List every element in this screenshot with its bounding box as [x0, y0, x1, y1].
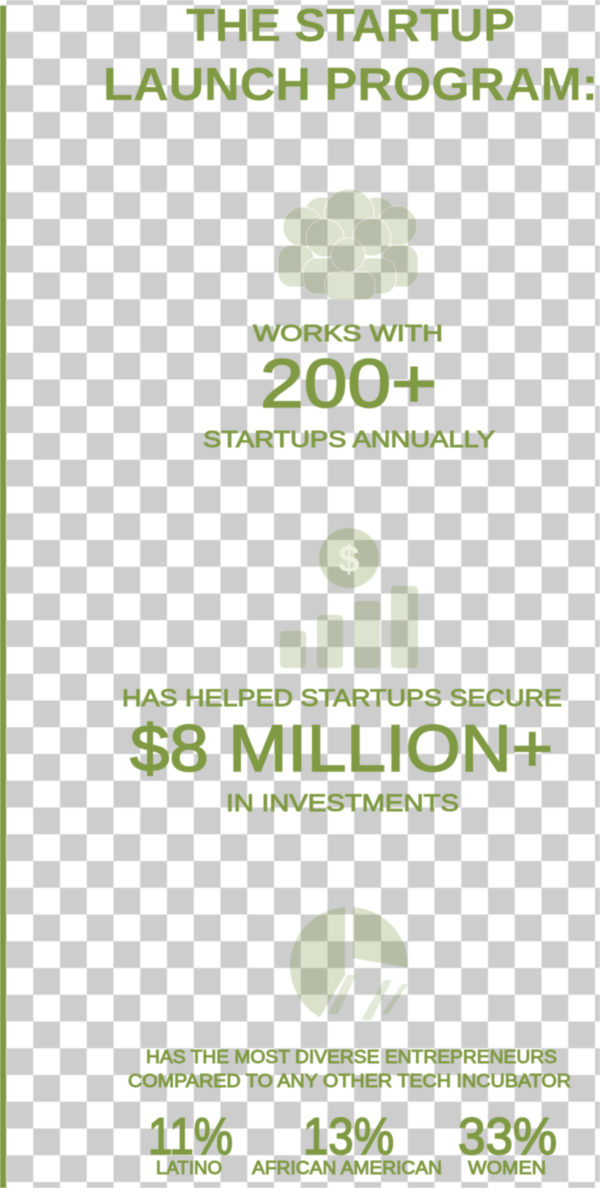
stat: 33% women: 33%: [458, 1108, 557, 1166]
stat: works with 200+: STARTUPS ANNUALLY: [203, 426, 495, 452]
icon: group of people: [278, 189, 418, 300]
stat: $8 million+ in investments: IN INVESTMENTS: [226, 790, 459, 817]
icon: dollar coin: $: [338, 539, 360, 581]
icon: pie chart: [290, 907, 408, 1025]
title: THE STARTUP: [186, 0, 515, 51]
stat: works with 200+: WORKS WITH: [253, 320, 443, 346]
left accent bar: [0, 6, 6, 1188]
stat: 11% latino: LATINO: [156, 1158, 222, 1178]
stat: works with 200+: [203, 320, 495, 452]
text: diversity statement: COMPARED TO ANY OTHER TECH INCUBATOR: [128, 1071, 571, 1091]
title: [103, 0, 598, 110]
stat: 13% african american: 13%: [303, 1108, 394, 1166]
stat: $8 million+ in investments: [122, 685, 562, 817]
stat: $8 million+ in investments: $8 MILLION+: [130, 711, 553, 785]
stat: 13% african american: [252, 1108, 442, 1178]
text: diversity statement: [128, 1047, 571, 1091]
stat: 11% latino: 11%: [148, 1108, 233, 1166]
text: diversity statement: HAS THE MOST DIVERSE ENTREPRENEURS: [146, 1047, 557, 1067]
icon: dollar coin and rising bars: [280, 528, 418, 668]
stat: 33% women: WOMEN: [468, 1158, 546, 1178]
stat: 13% african american: AFRICAN AMERICAN: [252, 1158, 442, 1178]
stat: works with 200+: 200+: [260, 345, 437, 422]
stat: $8 million+ in investments: HAS HELPED STARTUPS SECURE: [122, 685, 562, 712]
title: LAUNCH PROGRAM:: [103, 58, 598, 110]
icon: bars: [280, 586, 418, 668]
